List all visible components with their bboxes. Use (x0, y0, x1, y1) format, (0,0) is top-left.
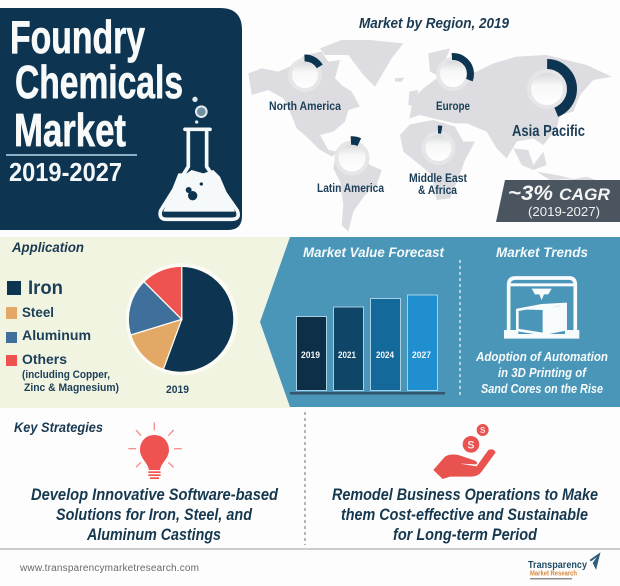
text: market trend: Adoption of Automation (475, 350, 608, 364)
label: north america: North America (269, 101, 342, 113)
legend (6, 278, 119, 394)
legend: Aluminum (22, 327, 91, 343)
footer: website: www.transparencymarketresearch.com (19, 563, 199, 574)
text: strategy two (332, 486, 598, 544)
label: middle east and africa: & Africa (418, 185, 458, 197)
logo: Transparency Market Research (528, 553, 600, 580)
icon: hand with coins: S (480, 426, 486, 435)
callout: CAGR (496, 180, 620, 222)
icon: light bulb (128, 422, 182, 479)
icon: hand with coins (433, 424, 496, 479)
legend: Others (22, 351, 67, 367)
icon: hand with coins: S (467, 439, 474, 451)
callout: CAGR: (2019-2027) (528, 204, 600, 219)
donut: north america (288, 58, 322, 92)
heading: Foundry Chemicals Market (10, 11, 183, 156)
text: strategy two: for Long-term Period (393, 526, 538, 544)
text: strategy one (31, 486, 279, 544)
text: strategy two: them Cost-effective and Sustainable (341, 506, 588, 524)
heading: application: Application (11, 239, 84, 255)
panel: title (0, 8, 242, 230)
text: market trend (475, 350, 608, 396)
label: middle east and africa: Middle East (409, 173, 467, 185)
heading: Foundry Chemicals Market: Market (14, 104, 126, 156)
logo: Transparency Market Research: Transparency (528, 559, 587, 571)
icon: flask (160, 97, 238, 219)
bar chart: 2019 (301, 350, 320, 360)
icon: 3D printer (504, 278, 579, 339)
heading: market trends: Market Trends (496, 245, 588, 260)
panel: application (0, 237, 292, 408)
heading: Foundry Chemicals Market: Foundry (10, 11, 145, 63)
heading: Foundry Chemicals Market: Chemicals (15, 56, 183, 108)
bar chart: 2021 (338, 350, 356, 360)
legend: Iron (28, 278, 63, 299)
world map (248, 40, 612, 232)
bar chart (290, 295, 445, 394)
legend: (including Copper, (22, 369, 110, 381)
panel: key strategies (14, 412, 598, 545)
donut: middle east and africa (420, 130, 457, 166)
legend: Zinc & Magnesium) (24, 382, 119, 394)
text: strategy one: Aluminum Castings (86, 526, 221, 544)
text: market trend: in 3D Printing of (498, 366, 588, 380)
pie label: 2019 (166, 384, 189, 396)
label: europe: Europe (436, 101, 470, 113)
donut: asia pacific (521, 63, 573, 115)
label: middle east and africa (409, 173, 467, 197)
bar chart: 2024 (376, 350, 394, 360)
legend: Steel (22, 304, 54, 320)
heading: market value forecast: Market Value Forecast (303, 245, 444, 260)
panel: market by region (248, 16, 620, 232)
callout: CAGR: CAGR (559, 186, 610, 204)
heading: key strategies: Key Strategies (14, 420, 103, 435)
subheading: years: 2019-2027 (9, 157, 122, 187)
logo: Transparency Market Research: Market Research (530, 570, 577, 578)
text: market trend: Sand Cores on the Rise (481, 382, 603, 396)
pie chart (126, 263, 238, 375)
label: asia pacific: Asia Pacific (512, 123, 585, 140)
text: strategy one: Develop Innovative Software-based (31, 486, 279, 504)
text: strategy one: Solutions for Iron, Steel, and (56, 506, 253, 524)
label: latin america: Latin America (317, 183, 385, 195)
donut: europe (435, 56, 471, 92)
donut: latin america (334, 140, 370, 176)
panel: forecast and trends (260, 237, 620, 407)
callout: CAGR: ~3% (508, 182, 553, 205)
heading: market by region: Market by Region, 2019 (359, 16, 509, 32)
bar chart: 2027 (412, 350, 431, 360)
